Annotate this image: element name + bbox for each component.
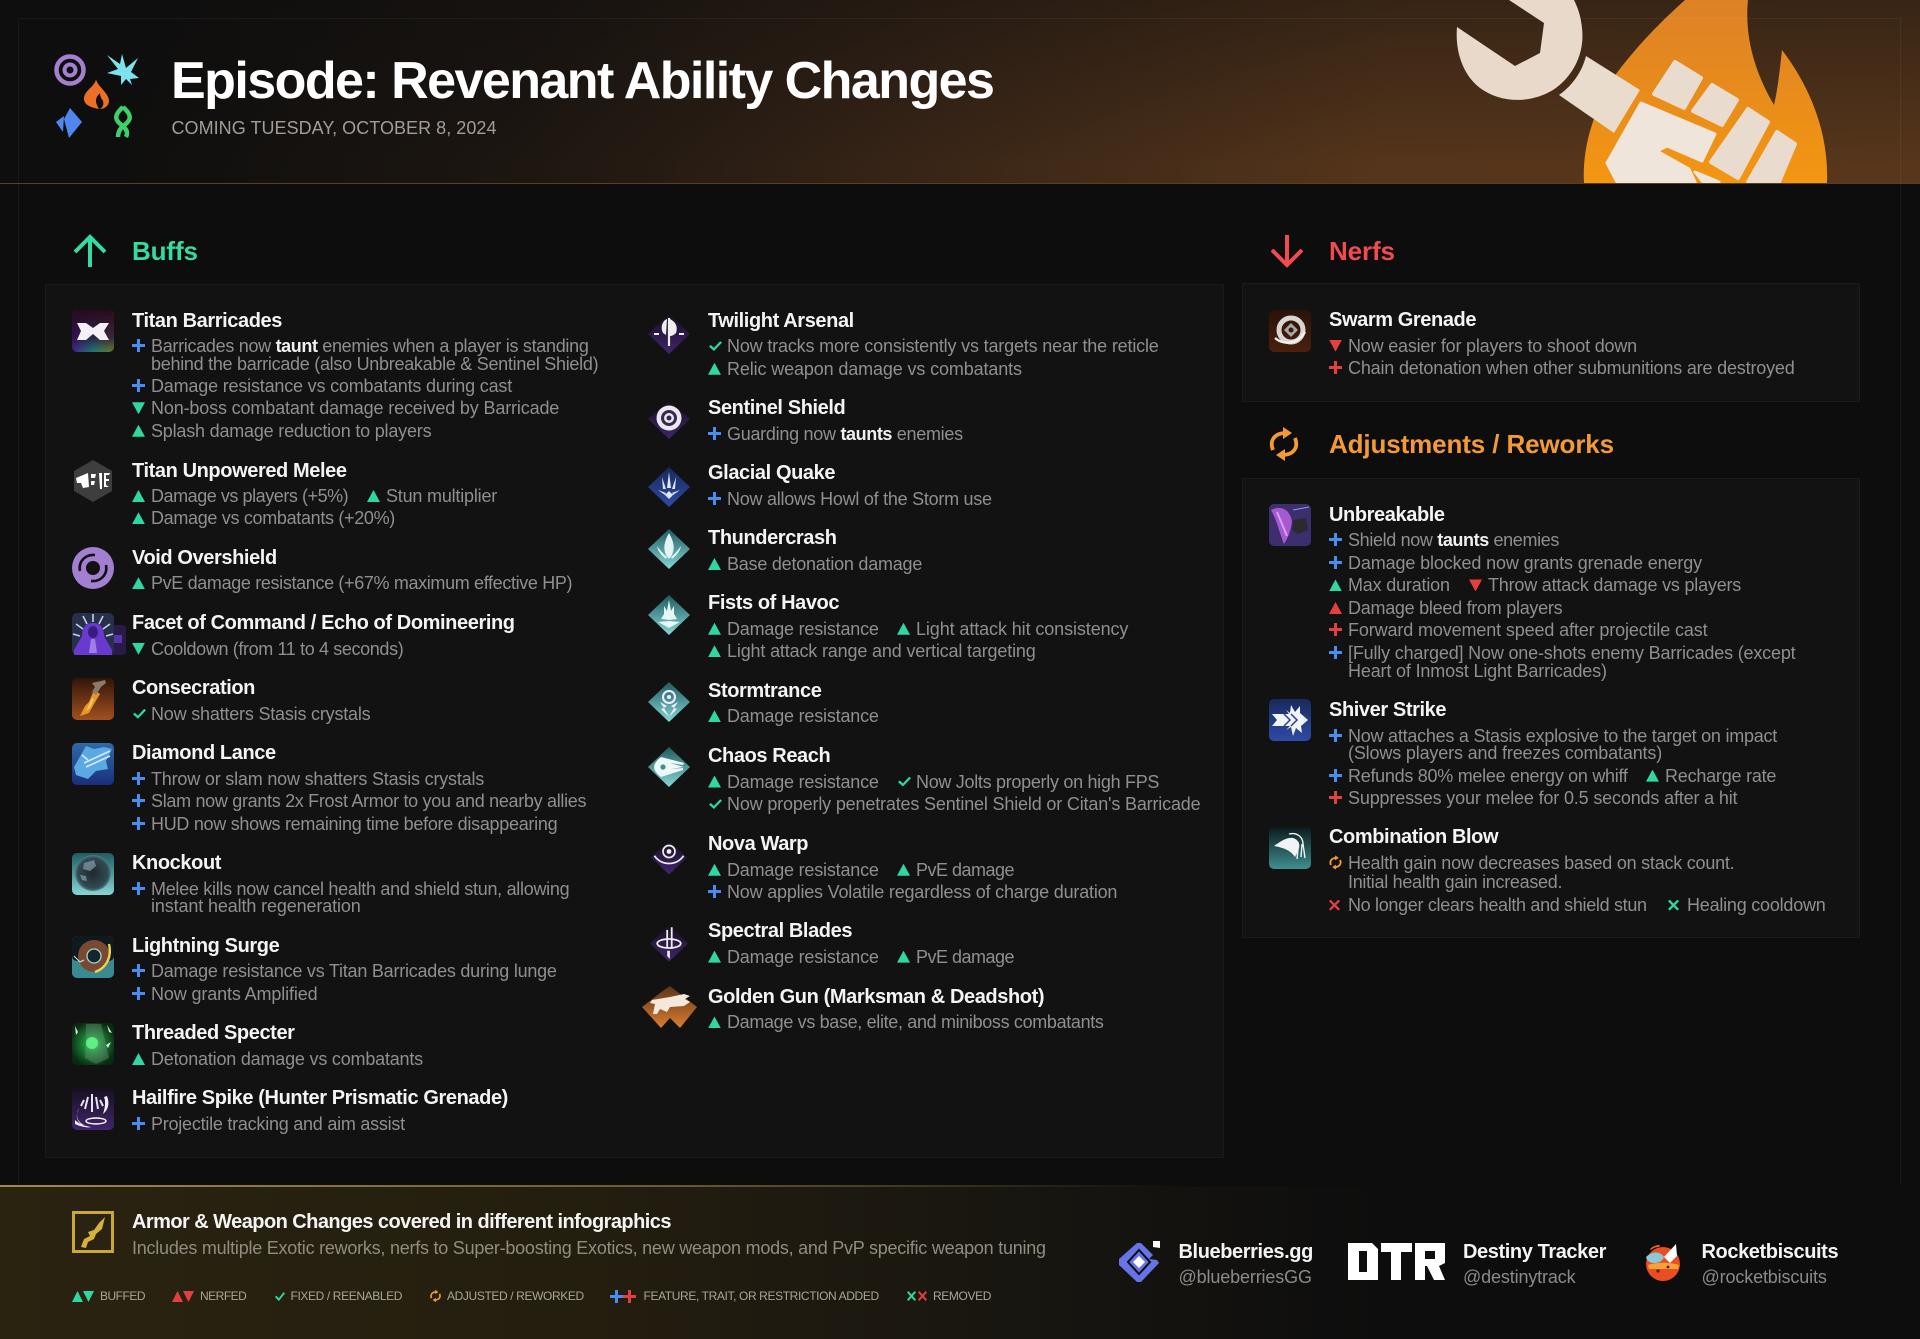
changes: Chain detonation when other submunitions are destroyed — [1348, 358, 1795, 378]
changes: Damage resistance vs combatants during cast — [151, 376, 512, 396]
changes: instant health regeneration — [151, 896, 361, 916]
icon: barricade — [72, 310, 114, 352]
changes — [708, 772, 1200, 814]
icon: golden gun — [642, 986, 697, 1028]
changes: Now shatters Stasis crystals — [151, 704, 370, 724]
title: Diamond Lance — [132, 742, 276, 764]
changes — [708, 619, 1128, 661]
panel: buffs background — [45, 284, 1224, 1158]
icon: hex melee — [74, 460, 112, 502]
changes: Suppresses your melee for 0.5 seconds after a hit — [1348, 788, 1737, 808]
title: Golden Gun (Marksman & Deadshot) — [708, 986, 1044, 1008]
item: Nova Warp — [651, 833, 1117, 902]
legend: fixed: FIXED / REENABLED — [290, 1289, 402, 1303]
changes: (Slows players and freezes combatants) — [1348, 743, 1662, 763]
subtitle: date: COMING TUESDAY, OCTOBER 8, 2024 — [172, 118, 497, 138]
icon: spectral blades — [650, 926, 688, 962]
icon: weapon changes — [72, 1211, 114, 1253]
changes: Initial health gain increased. — [1348, 872, 1562, 892]
item: Hailfire Spike — [72, 1087, 508, 1134]
item: Sentinel Shield — [648, 397, 963, 444]
changes: Base detonation damage — [727, 554, 922, 574]
item: Spectral Blades — [650, 920, 1014, 967]
title: Sentinel Shield — [708, 397, 845, 419]
changes: PvE damage — [916, 860, 1014, 880]
panel: nerfs background — [1242, 283, 1860, 402]
changes: Now applies Volatile regardless of charge duration — [727, 882, 1117, 902]
icon: combination blow — [1269, 827, 1311, 869]
item: Titan Unpowered Melee — [74, 460, 497, 528]
heading: adjustments: Adjustments / Reworks — [1329, 429, 1614, 459]
changes: Damage resistance — [727, 772, 879, 792]
item: Titan Barricades — [72, 310, 598, 441]
icon: unbreakable — [1269, 504, 1311, 546]
legend: nerfed: NERFED — [200, 1289, 246, 1303]
item: Glacial Quake — [648, 462, 992, 509]
changes: Now tracks more consistently vs targets near the reticle — [727, 336, 1159, 356]
icon: void ring — [72, 547, 114, 589]
icon: blueberries logo — [1118, 1241, 1160, 1283]
title: Knockout — [132, 852, 221, 874]
changes: Now Jolts properly on high FPS — [916, 772, 1159, 792]
icon: diamond lance — [72, 743, 114, 785]
credit: blueberries name: Blueberries.gg — [1178, 1241, 1313, 1263]
legend: buffed: BUFFED — [100, 1289, 145, 1303]
item: Void Overshield — [72, 547, 572, 593]
changes: Light attack range and vertical targeting — [727, 641, 1036, 661]
title: Lightning Surge — [132, 935, 279, 957]
icon: nerfs arrow down — [1270, 235, 1304, 268]
icon: consecration — [72, 678, 114, 720]
changes: Damage resistance vs Titan Barricades during lunge — [151, 961, 557, 981]
icon: fists of havoc — [648, 595, 690, 635]
footer description: Includes multiple Exotic reworks, nerfs to Super-boosting Exotics, new weapon mods, and PvP specific weapon tuning — [132, 1238, 1046, 1258]
legend — [72, 1290, 927, 1303]
logo: subclass elements — [54, 54, 139, 138]
item: Consecration — [72, 677, 370, 724]
changes: Now grants Amplified — [151, 984, 317, 1004]
heading: nerfs: Nerfs — [1329, 236, 1395, 266]
changes: Non-boss combatant damage received by Barricade — [151, 398, 559, 418]
changes: Projectile tracking and aim assist — [151, 1114, 405, 1134]
title: Titan Barricades — [132, 310, 282, 332]
changes: Forward movement speed after projectile cast — [1348, 620, 1707, 640]
changes — [132, 769, 586, 834]
icon: chaos reach — [648, 747, 690, 787]
changes: behind the barricade (also Unbreakable & Sentinel Shield) — [151, 354, 598, 374]
changes: Damage vs combatants (+20%) — [151, 508, 395, 528]
title: Void Overshield — [132, 547, 277, 569]
legend: feature: FEATURE, TRAIT, OR RESTRICTION ADDED — [644, 1289, 879, 1303]
icon: nova warp — [651, 840, 687, 874]
icon: stormtrance — [648, 682, 690, 722]
logo: rocketbiscuits — [1644, 1243, 1682, 1281]
icon: thundercrash — [648, 529, 690, 569]
changes: Now attaches a Stasis explosive to the target on impact — [1348, 726, 1777, 746]
title: Episode: Revenant Ability Changes — [171, 52, 993, 110]
item: Stormtrance — [648, 680, 879, 726]
title: Thundercrash — [708, 527, 837, 549]
title: Chaos Reach — [708, 745, 830, 767]
icon: shiver strike — [1269, 699, 1311, 741]
changes: Light attack hit consistency — [916, 619, 1128, 639]
heading: buffs: Buffs — [132, 236, 198, 266]
item: Shiver Strike — [1269, 699, 1778, 808]
title: Spectral Blades — [708, 920, 852, 942]
changes: No longer clears health and shield stun — [1348, 895, 1647, 915]
changes — [132, 879, 569, 916]
title: Combination Blow — [1329, 826, 1498, 848]
changes — [708, 336, 1159, 379]
changes: Recharge rate — [1665, 766, 1776, 786]
title: Fists of Havoc — [708, 592, 839, 614]
changes: Barricades now taunt enemies when a player is standing — [151, 336, 589, 356]
changes — [1329, 726, 1778, 808]
icon: adjustments cycle — [1270, 427, 1298, 461]
credit: destiny tracker name: Destiny Tracker — [1463, 1241, 1606, 1263]
title: Twilight Arsenal — [708, 310, 854, 332]
changes: Melee kills now cancel health and shield stun, allowing — [151, 879, 569, 899]
changes: Refunds 80% melee energy on whiff — [1348, 766, 1628, 786]
changes — [708, 947, 1014, 967]
changes: Damage resistance — [727, 860, 879, 880]
changes: PvE damage — [916, 947, 1014, 967]
changes: Splash damage reduction to players — [151, 421, 431, 441]
icon: lightning surge — [72, 936, 114, 978]
changes — [132, 961, 557, 1004]
changes: Relic weapon damage vs combatants — [727, 359, 1022, 379]
title: Shiver Strike — [1329, 699, 1446, 721]
icon: buffs arrow up — [74, 234, 106, 267]
item: Unbreakable — [1269, 504, 1796, 681]
icon: hailfire spike — [72, 1088, 114, 1130]
item: Lightning Surge — [72, 935, 557, 1004]
icon: threaded specter — [72, 1023, 114, 1065]
credit: blueberries handle: @blueberriesGG — [1178, 1267, 1312, 1287]
icon: glacial quake — [648, 467, 690, 507]
title: Glacial Quake — [708, 462, 835, 484]
item: Twilight Arsenal — [648, 310, 1159, 379]
icon: knockout — [72, 853, 114, 895]
legend: removed: REMOVED — [933, 1289, 991, 1303]
logo: DTR — [1348, 1243, 1445, 1280]
icon: twilight arsenal — [648, 314, 690, 354]
changes — [132, 336, 598, 441]
legend: adjusted: ADJUSTED / REWORKED — [447, 1289, 584, 1303]
item: Diamond Lance — [72, 742, 586, 834]
title: Hailfire Spike (Hunter Prismatic Grenade) — [132, 1087, 508, 1109]
title: Titan Unpowered Melee — [132, 460, 347, 482]
changes: Now properly penetrates Sentinel Shield or Citan's Barricade — [727, 794, 1200, 814]
title: Stormtrance — [708, 680, 821, 702]
changes: Shield now taunts enemies — [1348, 530, 1559, 550]
title: Consecration — [132, 677, 255, 699]
panel: adjustments background — [1242, 478, 1860, 938]
footer band — [0, 1185, 1920, 1339]
icon: facet — [72, 613, 126, 655]
changes: Damage resistance — [727, 619, 879, 639]
changes — [1329, 336, 1795, 378]
credit: destiny tracker handle: @destinytrack — [1463, 1267, 1576, 1287]
footer heading: Armor & Weapon Changes covered in different infographics — [132, 1211, 671, 1233]
changes: Healing cooldown — [1687, 895, 1826, 915]
changes: Throw or slam now shatters Stasis crystals — [151, 769, 484, 789]
title: Nova Warp — [708, 833, 808, 855]
changes: PvE damage resistance (+67% maximum effective HP) — [151, 573, 572, 593]
changes: Stun multiplier — [386, 486, 497, 506]
credit: rocketbiscuits handle: @rocketbiscuits — [1702, 1267, 1827, 1287]
changes: [Fully charged] Now one-shots enemy Barricades (except — [1348, 643, 1796, 663]
changes — [132, 486, 497, 528]
item: Golden Gun — [642, 986, 1104, 1032]
illustration: wrench fist in flame — [1456, 0, 1828, 183]
changes: Guarding now taunts enemies — [727, 424, 963, 444]
changes: Heart of Inmost Light Barricades) — [1348, 661, 1607, 681]
changes: Damage resistance — [727, 706, 879, 726]
changes: Damage bleed from players — [1348, 598, 1562, 618]
item: Threaded Specter — [72, 1022, 423, 1069]
title: Unbreakable — [1329, 504, 1445, 526]
item: Thundercrash — [648, 527, 922, 574]
title: Threaded Specter — [132, 1022, 295, 1044]
changes: Damage blocked now grants grenade energy — [1348, 553, 1702, 573]
icon: swarm grenade — [1269, 310, 1311, 352]
changes: Throw attack damage vs players — [1488, 575, 1741, 595]
item: Knockout — [72, 852, 569, 916]
item: Chaos Reach — [648, 745, 1200, 814]
changes: HUD now shows remaining time before disappearing — [151, 814, 557, 834]
changes: Damage vs base, elite, and miniboss combatants — [727, 1012, 1104, 1032]
changes — [1329, 853, 1826, 915]
changes: Detonation damage vs combatants — [151, 1049, 423, 1069]
changes — [708, 860, 1117, 902]
changes: Now allows Howl of the Storm use — [727, 489, 992, 509]
changes: Cooldown (from 11 to 4 seconds) — [151, 639, 403, 659]
item: Swarm Grenade — [1269, 309, 1795, 378]
changes: Max duration — [1348, 575, 1450, 595]
changes: Damage resistance — [727, 947, 879, 967]
icon: sentinel shield — [648, 401, 690, 439]
item: Fists of Havoc — [648, 592, 1128, 661]
changes: Damage vs players (+5%) — [151, 486, 348, 506]
item: Facet of Command — [72, 612, 515, 659]
title: Facet of Command / Echo of Domineering — [132, 612, 515, 634]
changes — [1329, 530, 1796, 681]
changes: Slam now grants 2x Frost Armor to you and nearby allies — [151, 791, 586, 811]
changes: Now easier for players to shoot down — [1348, 336, 1637, 356]
changes: Health gain now decreases based on stack count. — [1348, 853, 1734, 873]
item: Combination Blow — [1269, 826, 1826, 915]
credit: rocketbiscuits name: Rocketbiscuits — [1702, 1241, 1838, 1263]
header band — [0, 0, 1920, 184]
title: Swarm Grenade — [1329, 309, 1476, 331]
